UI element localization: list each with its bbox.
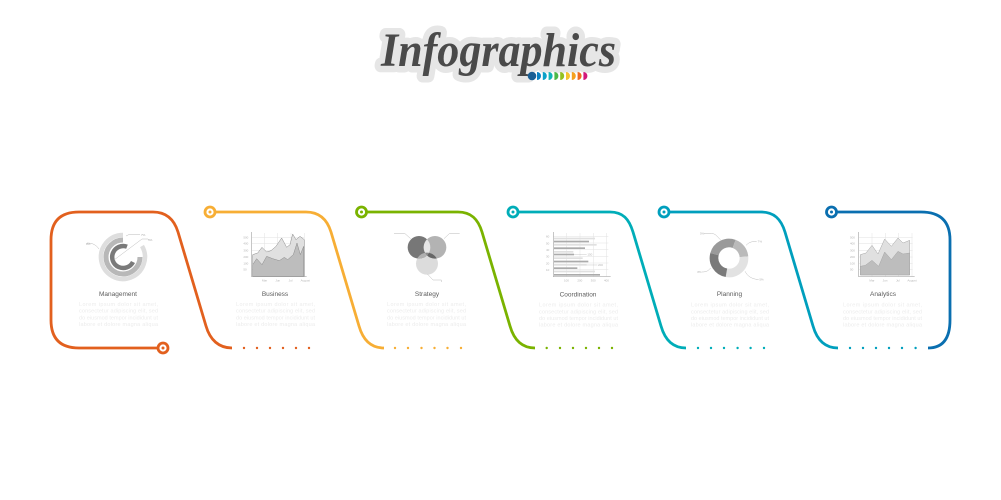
- icon: area chart: 300: [243, 248, 249, 252]
- icon: horizontal bar chart: 100: [564, 278, 569, 282]
- dots: green row: [546, 347, 613, 349]
- text block: Management: Lorem ipsum dolor sit amet,: [79, 302, 158, 308]
- text block: Management: do eiusmod tempor incididunt ut: [79, 315, 158, 321]
- text block: Planning: consectetur adipiscing elit, sed: [691, 309, 769, 315]
- icon: stacked area chart: 200: [850, 255, 855, 259]
- text block: Strategy: Lorem ipsum dolor sit amet,: [387, 302, 466, 308]
- icon: area chart: 200: [243, 255, 249, 259]
- text block: Analytics: consectetur adipiscing elit, sed: [843, 309, 922, 315]
- icon: area chart: August: [301, 278, 310, 282]
- panel: Planning: [659, 207, 917, 349]
- dots: amber row: [394, 347, 462, 349]
- text block: Planning: Lorem ipsum dolor sit amet,: [691, 303, 769, 309]
- icon: area chart: Jun: [275, 278, 280, 282]
- title: Infographics logo: Infographics: [380, 24, 616, 77]
- connector line: teal: [513, 212, 686, 348]
- icon: stacked area chart: Jun: [883, 278, 888, 282]
- panel: Business: [205, 207, 462, 349]
- icon: stacked area chart: Mar: [869, 278, 874, 282]
- icon: area chart: 500: [243, 235, 249, 239]
- text block: Analytics: labore et dolore magna aliqua: [843, 323, 923, 329]
- text block: Analytics: do eiusmod tempor incididunt ut: [843, 316, 922, 322]
- text block: Planning: labore et dolore magna aliqua: [691, 323, 770, 329]
- label: Business: Business: [262, 291, 289, 298]
- label: Strategy: Strategy: [415, 291, 440, 298]
- text block: Coordination: labore et dolore magna aliqua: [539, 323, 619, 329]
- panel: Management: [51, 212, 310, 353]
- icon: horizontal bar chart: [546, 232, 611, 282]
- icon: horizontal bar chart: 40: [546, 248, 550, 252]
- icon: area chart: 50: [243, 268, 247, 272]
- label: Planning: Planning: [717, 291, 743, 298]
- icon: horizontal bar chart: 150: [587, 253, 593, 257]
- icon: horizontal bar chart: 60: [546, 235, 550, 239]
- node: orange ring: [158, 343, 168, 353]
- icon: venn diagram: [394, 233, 460, 282]
- text block: Business: labore et dolore magna aliqua: [236, 322, 316, 328]
- icon: horizontal bar chart: 50: [546, 241, 550, 245]
- label: Analytics: Analytics: [870, 291, 897, 298]
- icon: area chart: [243, 232, 310, 282]
- connector line: green: [362, 212, 535, 348]
- icon: stacked area chart: [850, 232, 917, 282]
- text block: Coordination: [539, 303, 619, 329]
- icon: horizontal bar chart: 10: [546, 268, 550, 272]
- icon: donut chart: 5%: [700, 231, 705, 235]
- dots: orange row: [243, 347, 310, 349]
- panel: Coordination: [508, 207, 765, 349]
- dots: teal row: [697, 347, 765, 349]
- node: amber ring: [205, 207, 215, 217]
- dots: cyan row: [849, 347, 917, 349]
- text block: Strategy: [387, 302, 467, 328]
- icon: stacked area chart: 300: [850, 248, 855, 252]
- panel: Analytics: [826, 207, 950, 348]
- icon: area chart: Jul: [289, 278, 293, 282]
- text block: Business: Lorem ipsum dolor sit amet,: [236, 302, 315, 308]
- text block: Planning: do eiusmod tempor incididunt ut: [691, 316, 769, 322]
- connector line: orange: [51, 212, 232, 348]
- icon: concentric radial chart: 5%: [148, 238, 153, 242]
- text block: Management: consectetur adipiscing elit, sed: [79, 309, 158, 315]
- text block: Coordination: Lorem ipsum dolor sit amet,: [539, 303, 618, 309]
- text block: Coordination: consectetur adipiscing elit, sed: [539, 309, 618, 315]
- colour dots under title: [528, 72, 587, 80]
- icon: stacked area chart: 100: [850, 261, 855, 265]
- text block: Management: labore et dolore magna aliqua: [79, 322, 159, 328]
- node: teal ring: [508, 207, 518, 217]
- text block: Strategy: consectetur adipiscing elit, sed: [387, 309, 466, 315]
- text block: Management: [79, 302, 159, 328]
- text block: Analytics: Lorem ipsum dolor sit amet,: [843, 303, 922, 309]
- icon: horizontal bar chart: 400: [604, 278, 609, 282]
- icon: area chart: 100: [243, 261, 249, 265]
- node: green ring: [356, 207, 366, 217]
- icon: stacked area chart: 500: [850, 235, 855, 239]
- icon: horizontal bar chart: 30: [546, 255, 550, 259]
- icon: area chart: Mar: [262, 278, 267, 282]
- panel: Strategy: [356, 207, 613, 349]
- node: blue ring: [826, 207, 836, 217]
- text block: Business: consectetur adipiscing elit, sed: [236, 309, 315, 315]
- connector line: amber: [210, 212, 384, 348]
- text block: Analytics: [843, 303, 923, 329]
- icon: donut chart: 5%: [759, 278, 764, 282]
- icon: stacked area chart: 50: [850, 268, 854, 272]
- icon: concentric radial chart: [86, 233, 153, 279]
- icon: area chart: 400: [243, 242, 249, 246]
- icon: concentric radial chart: 7%: [141, 233, 146, 237]
- label: Coordination: Coordination: [560, 292, 597, 299]
- icon: donut chart: 8%: [697, 270, 702, 274]
- icon: horizontal bar chart: 300: [591, 278, 596, 282]
- icon: donut chart: [697, 231, 764, 282]
- text block: Planning: [691, 303, 770, 329]
- connector line: blue: [832, 212, 950, 348]
- icon: stacked area chart: 400: [850, 242, 855, 246]
- text block: Coordination: do eiusmod tempor incididunt ut: [539, 316, 618, 322]
- text block: Strategy: do eiusmod tempor incididunt ut: [387, 315, 466, 321]
- icon: concentric radial chart: 8%: [86, 242, 91, 246]
- connector line: cyan blue: [664, 212, 838, 348]
- icon: stacked area chart: Jul: [896, 278, 900, 282]
- icon: horizontal bar chart: 200: [598, 263, 603, 267]
- icon: horizontal bar chart: 20: [546, 261, 550, 265]
- text block: Strategy: labore et dolore magna aliqua: [387, 322, 467, 328]
- icon: donut chart: 7%: [758, 239, 762, 243]
- title: Infographics logo: Infographics: [380, 24, 616, 77]
- icon: horizontal bar chart: 200: [577, 278, 583, 282]
- node: cyan blue ring: [659, 207, 669, 217]
- text block: Business: [236, 302, 316, 328]
- text block: Business: do eiusmod tempor incididunt ut: [236, 315, 315, 321]
- icon: stacked area chart: August: [907, 278, 917, 282]
- label: Management: Management: [99, 291, 137, 298]
